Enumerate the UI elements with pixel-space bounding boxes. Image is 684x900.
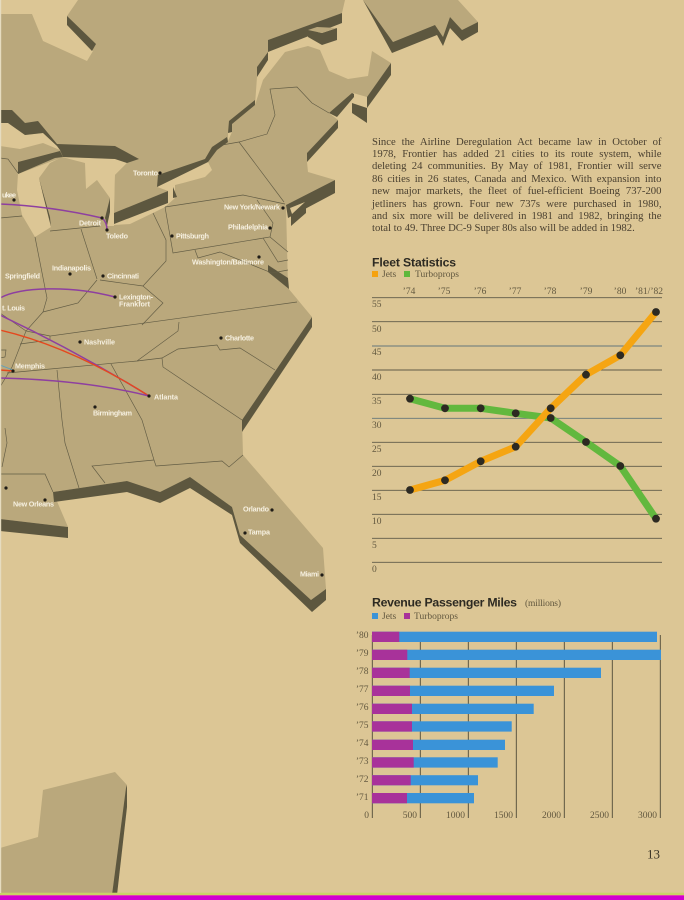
x axis labels: ’78 [544, 287, 557, 297]
bottom left landmass: Alaska or Caribbean fragment [0, 772, 127, 895]
route: St. Louis to Atlanta [0, 315, 149, 396]
body paragraph: 1978, Frontier has added 21 cities to its route system, while [372, 148, 662, 160]
body paragraph: deleting 24 communities. By May of 1981, Frontier will serve [372, 160, 662, 172]
city labels: Detroit [79, 218, 102, 228]
year labels: ’72 [356, 775, 369, 785]
legend: Revenue Passenger Miles: Turboprops [414, 612, 458, 622]
turboprops bars [372, 632, 414, 803]
city labels: Cincinnati [107, 272, 139, 280]
bottom edge band [0, 893, 684, 900]
city labels: t. Louis [2, 304, 25, 312]
year labels: ’74 [356, 739, 369, 749]
x axis labels [403, 287, 663, 297]
city labels: Nashville [84, 338, 115, 346]
michigan lower peninsula [39, 157, 110, 231]
top right landmass: Newfoundland [363, 0, 478, 53]
city labels: New Orleans [13, 500, 54, 508]
city dots [4, 171, 324, 577]
bar chart: revenue passenger miles [356, 631, 661, 821]
city labels: Atlanta [154, 392, 179, 402]
series: turboprops [410, 399, 656, 519]
city labels: Toledo [106, 232, 129, 240]
y axis labels: 10 [372, 517, 382, 527]
page number: 13 [647, 846, 660, 862]
legend: Revenue Passenger Miles [372, 612, 458, 622]
year labels: ’73 [356, 757, 369, 767]
year labels: ’77 [356, 685, 369, 695]
y axis labels: 50 [372, 325, 382, 335]
value labels: 3000 [638, 811, 657, 821]
year labels: ’75 [356, 721, 369, 731]
route: red to Memphis [0, 370, 13, 371]
quebec island [308, 27, 337, 33]
route lines [0, 204, 149, 396]
city labels: Springfield [5, 272, 40, 280]
x axis labels: ’75 [438, 287, 451, 297]
y axis labels: 35 [372, 397, 382, 407]
city labels: Toronto [133, 168, 159, 178]
body paragraph: 86 cities in 26 states, Canada and Mexico. With expansion into [372, 173, 662, 185]
value labels: 500 [403, 811, 417, 821]
x axis labels: ’76 [474, 287, 487, 297]
city labels [2, 168, 319, 578]
ontario peninsula [114, 163, 168, 213]
year labels: ’76 [356, 703, 369, 713]
y axis labels: 40 [372, 373, 382, 383]
year labels: ’80 [356, 631, 369, 641]
y axis labels: 45 [372, 348, 382, 358]
y axis labels: 30 [372, 421, 382, 431]
value labels [364, 811, 657, 821]
x axis labels: ’81/’82 [635, 287, 663, 297]
year labels: ’71 [356, 793, 369, 803]
city labels: Memphis [15, 362, 45, 370]
left scan edge [0, 0, 1, 893]
data points [406, 308, 660, 523]
city labels: Lexington- [119, 292, 154, 302]
value labels: 1000 [446, 811, 465, 821]
value labels: 2000 [542, 811, 561, 821]
x axis labels: ’74 [403, 287, 416, 297]
y axis labels: 15 [372, 493, 382, 503]
map of eastern North America [0, 0, 478, 895]
heading: Revenue Passenger Miles: (millions) [525, 598, 561, 609]
jets bars [372, 632, 661, 803]
y axis labels: 55 [372, 300, 382, 310]
legend: Fleet Statistics [372, 270, 459, 280]
x axis labels: ’77 [509, 287, 522, 297]
route: Memphis to Atlanta [0, 378, 149, 396]
value labels: 0 [364, 811, 369, 821]
city labels: Tampa [248, 528, 271, 536]
city labels: Indianapolis [52, 264, 91, 272]
coast shadows [0, 13, 391, 612]
route: red to Atlanta [0, 330, 149, 396]
body paragraph: total to 49. Three DC-9 Super 80s also will be added in 1982. [372, 222, 635, 234]
heading: Revenue Passenger Miles: Revenue Passenger Miles [372, 596, 517, 610]
body paragraph: new major markets, the fleet of fuel-efficient Boeing 737-200 [372, 185, 662, 197]
long island sound [290, 202, 305, 214]
value labels: 1500 [494, 811, 513, 821]
body paragraph [372, 136, 662, 234]
y axis labels: 20 [372, 469, 382, 479]
heading: Fleet Statistics: Fleet Statistics [372, 256, 456, 270]
city labels: Orlando [243, 504, 270, 514]
city labels: Washington/Baltimore [192, 258, 264, 266]
city labels: Charlotte [225, 334, 254, 342]
x axis labels: ’79 [580, 287, 593, 297]
x axis labels: ’80 [614, 287, 627, 297]
line chart: fleet size [372, 287, 663, 575]
legend: Fleet Statistics: Jets [382, 270, 397, 280]
great lakes and waterways [0, 52, 285, 237]
route: to Lexington-Frankfort [0, 289, 115, 298]
y axis labels: 0 [372, 565, 377, 575]
y axis labels [372, 300, 382, 575]
body paragraph: Since the Airline Deregulation Act became law in October of [372, 136, 662, 148]
body paragraph: and six more will be delivered in 1981 and 1982, bringing the [372, 210, 662, 222]
city labels: ukee [2, 190, 16, 200]
y axis labels: 5 [372, 541, 377, 551]
city labels: Birmingham [93, 408, 132, 418]
series: jets [410, 312, 656, 490]
year labels: ’79 [356, 649, 369, 659]
route: blue to Memphis [0, 365, 13, 370]
value labels: 2500 [590, 811, 609, 821]
state borders [0, 87, 329, 492]
city labels: Miami [300, 570, 319, 578]
body paragraph: jetliners has grown. Four new 737s were purchased in 1980, [372, 198, 662, 210]
legend: Revenue Passenger Miles: Jets [382, 612, 397, 622]
route: Milwaukee to Detroit [0, 204, 107, 230]
year labels [356, 631, 369, 803]
city labels: New York/Newark [224, 202, 280, 212]
landmass [0, 0, 391, 600]
city labels: Philadelphia [228, 222, 269, 232]
year labels: ’78 [356, 667, 369, 677]
city labels: Frankfort [119, 300, 151, 308]
y axis labels: 25 [372, 445, 382, 455]
city labels: Pittsburgh [176, 232, 209, 240]
legend: Fleet Statistics: Turboprops [415, 270, 459, 280]
